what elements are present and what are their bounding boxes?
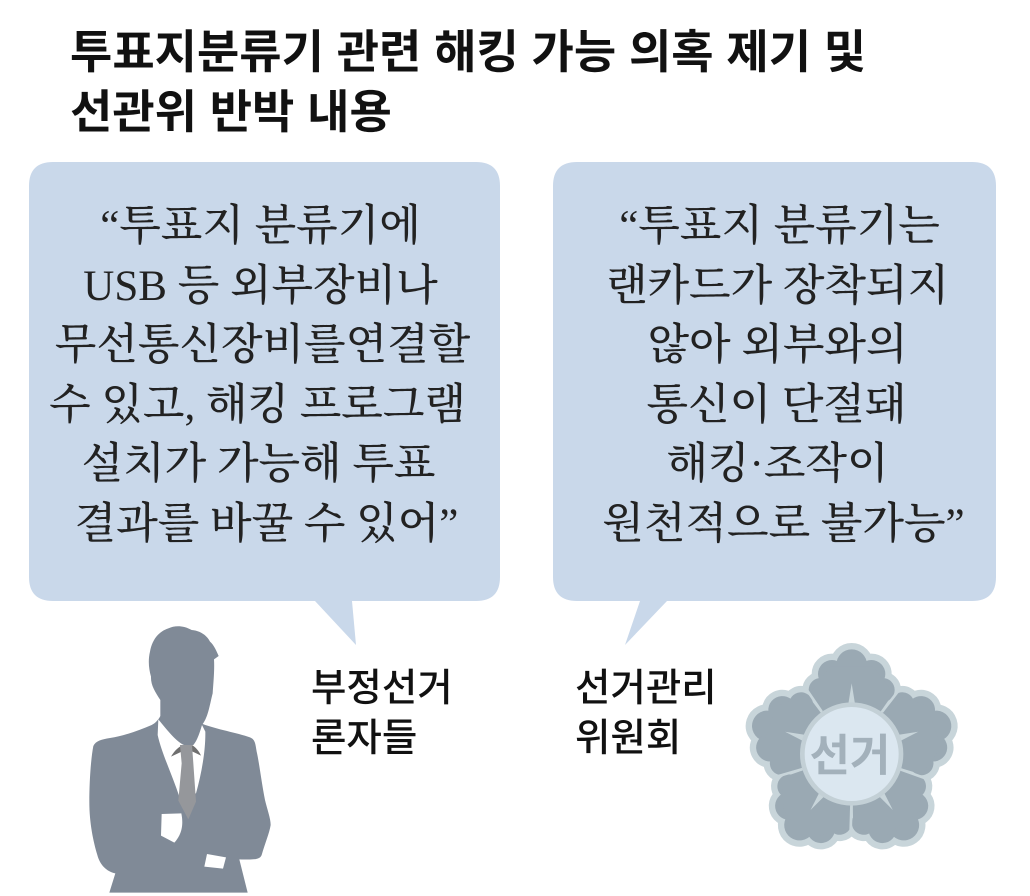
left bubble text: 무선통신장비를연결할 xyxy=(55,322,470,369)
label: election commission: 위원회 xyxy=(575,717,681,760)
left bubble text xyxy=(49,202,470,548)
right bubble text: 랜카드가 장착되지 xyxy=(606,263,949,310)
left bubble text: 수 있고, 해킹 프로그램 xyxy=(49,382,466,429)
tie knot xyxy=(171,745,201,757)
label: election fraud advocates xyxy=(311,667,453,760)
emblem petals xyxy=(739,649,964,863)
emblem centre disc xyxy=(802,705,901,803)
left bubble text: “투표지 분류기에 xyxy=(100,203,421,250)
panel: right speech bubble xyxy=(553,162,996,645)
right bubble text: 통신이 단절돼 xyxy=(646,382,906,429)
title xyxy=(70,26,866,138)
cuff xyxy=(204,854,226,869)
left bubble text: 결과를 바꿀 수 있어” xyxy=(75,501,458,548)
title: 투표지분류기 관련 해킹 가능 의혹 제기 및 xyxy=(70,26,866,78)
right bubble text: “투표지 분류기는 xyxy=(619,203,940,250)
pocket square xyxy=(161,813,182,843)
right bubble text: 해킹·조작이 xyxy=(666,441,888,488)
right bubble text xyxy=(602,202,965,548)
left bubble text: 설치가 가능해 투표 xyxy=(82,441,435,488)
emblem text: 선거 xyxy=(810,732,890,781)
tie xyxy=(178,745,196,819)
shirt xyxy=(158,719,205,797)
right bubble text: 원천적으로 불가능” xyxy=(602,501,965,548)
left bubble text: USB 등 외부장비나 xyxy=(83,263,438,310)
icon: election commission emblem xyxy=(739,649,964,863)
emblem rays xyxy=(784,683,920,813)
right bubble text: 않아 외부와의 xyxy=(648,322,907,369)
label: election fraud advocates: 론자들 xyxy=(311,717,417,760)
emblem outline xyxy=(739,649,964,863)
icon: man silhouette xyxy=(89,626,271,893)
label: election fraud advocates: 부정선거 xyxy=(311,667,453,710)
label: election commission xyxy=(575,667,717,760)
label: election commission: 선거관리 xyxy=(575,667,717,710)
petal dividers xyxy=(776,689,927,832)
panel: left speech bubble xyxy=(29,162,500,645)
title: 선관위 반박 내용 xyxy=(70,86,392,138)
